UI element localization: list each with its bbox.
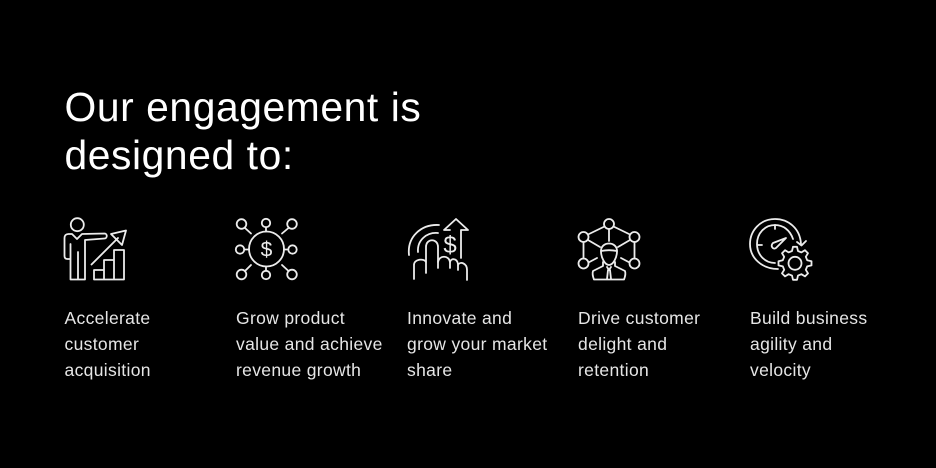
caption: customer delight: Drive customer [578,308,700,328]
caption: business agility: agility and [750,334,832,354]
caption: market share: grow your market [407,334,547,354]
caption: product value [236,308,383,380]
caption: business agility: velocity [750,360,811,380]
title [64,84,421,178]
icon: network around a person [578,219,640,280]
caption: customer acquisition: acquisition [64,360,151,380]
caption: business agility [750,308,867,380]
caption: market share: Innovate and [407,308,512,328]
icon: dollar hub with connected nodes: $ [261,238,273,262]
icon: presenter pointing at growth chart [64,218,126,280]
caption: market share: share [407,360,452,380]
caption: market share [407,308,547,380]
caption: product value: Grow product [236,308,345,328]
caption: customer acquisition [64,308,151,380]
icon: speedometer with gear [750,219,812,280]
title: designed to: [64,132,294,178]
icon: dollar hub with connected nodes [236,219,297,279]
caption: customer delight: delight and [578,334,667,354]
title: Our engagement is [64,84,421,130]
caption: customer delight [578,308,700,380]
icon: finger tap with dollar and rising arrow: $ [443,232,457,259]
icon: finger tap with dollar and rising arrow [409,219,468,280]
caption: product value: value and achieve [236,334,383,354]
caption: business agility: Build business [750,308,867,328]
caption: product value: revenue growth [236,360,361,380]
caption: customer delight: retention [578,360,649,380]
caption: customer acquisition: customer [64,334,139,354]
caption: customer acquisition: Accelerate [64,308,150,328]
